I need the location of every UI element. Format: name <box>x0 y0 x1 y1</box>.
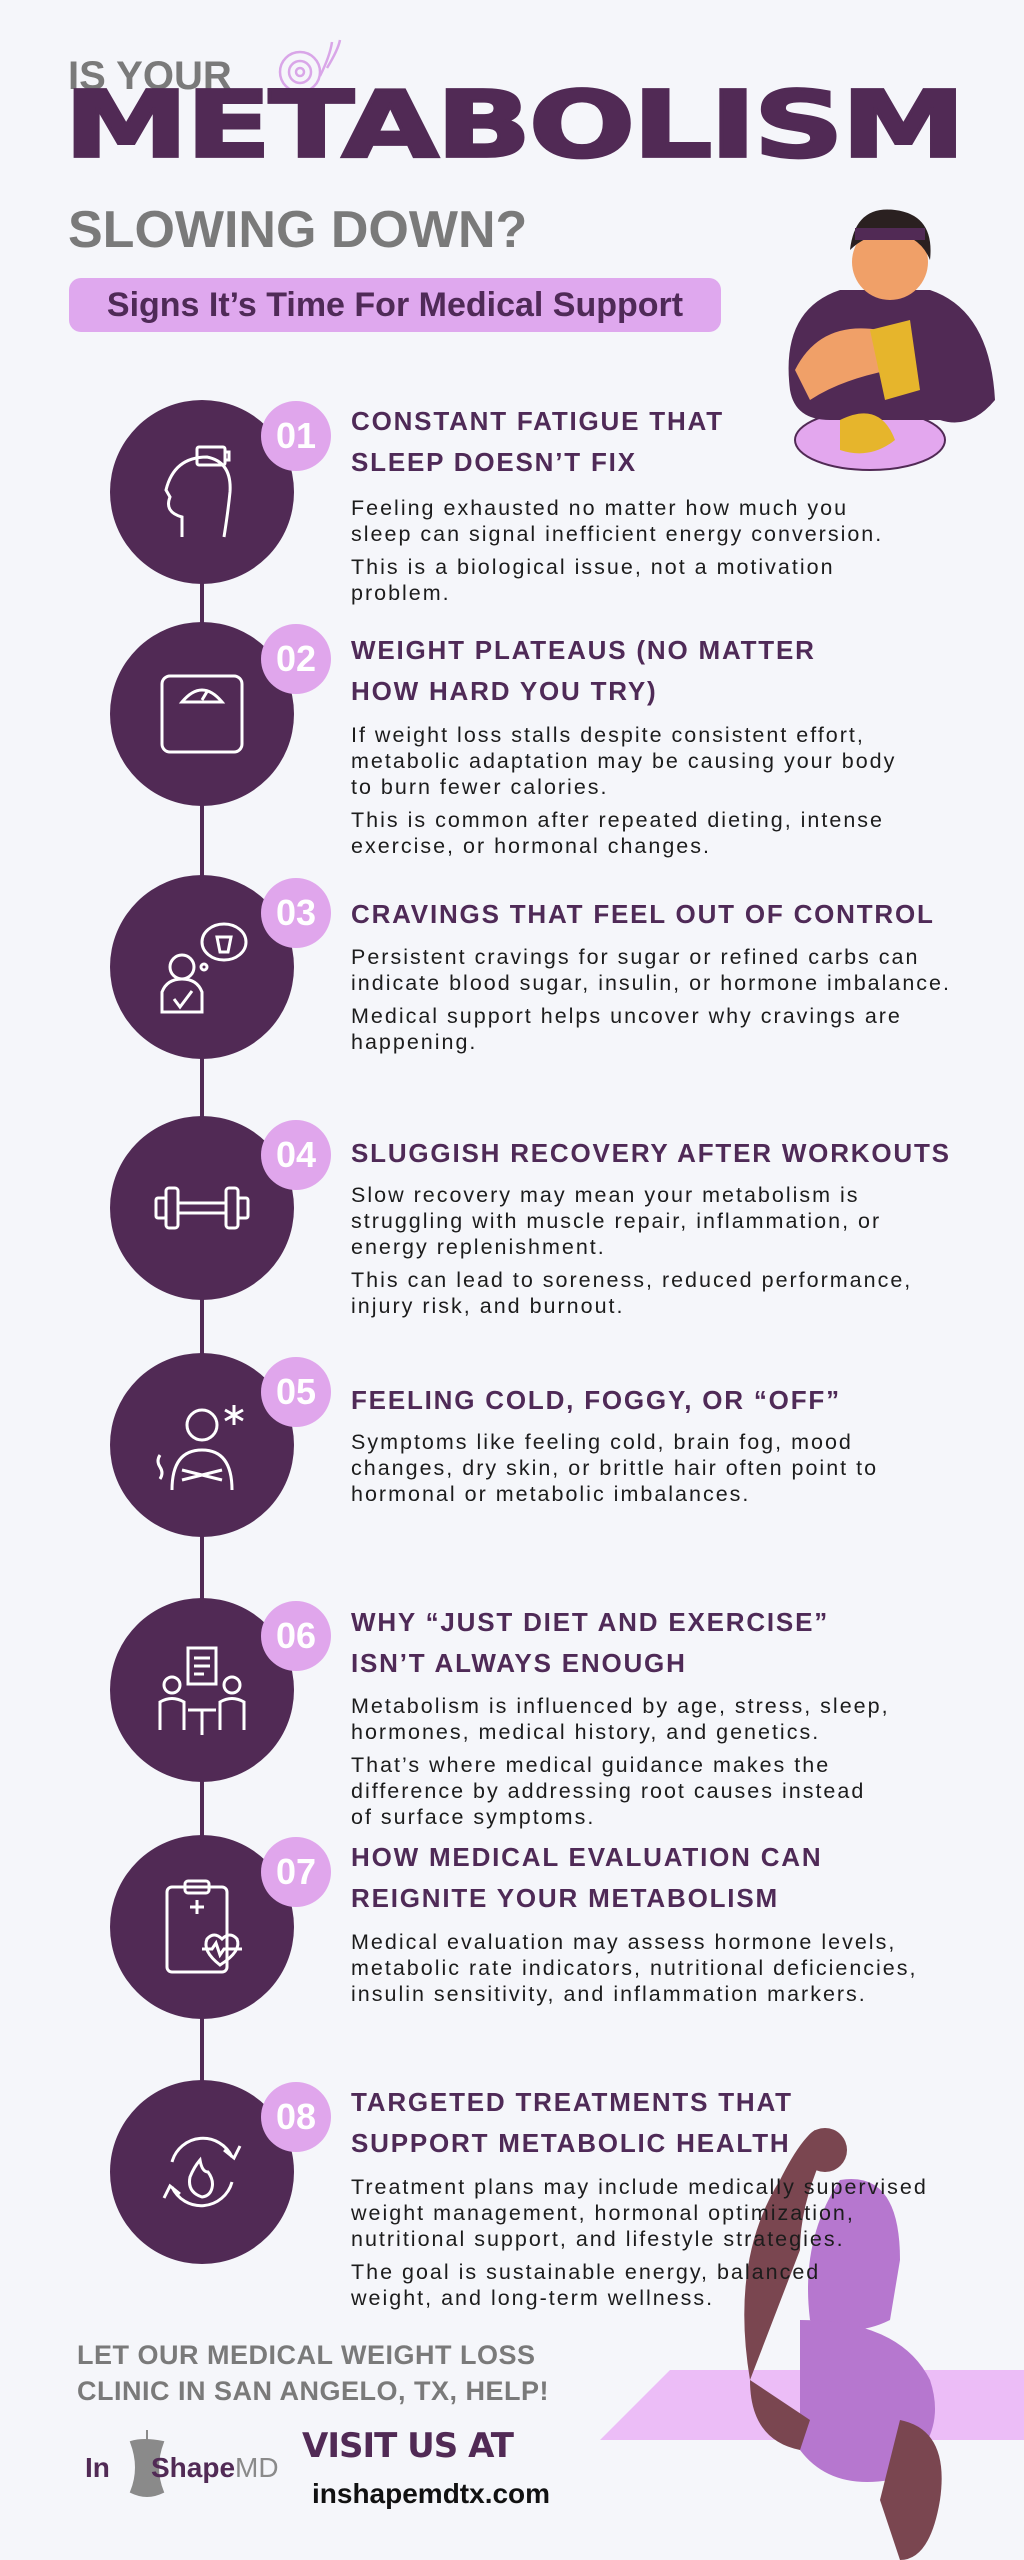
body 08: weight management, hormonal optimization, <box>351 2201 855 2225</box>
heading 02: HOW HARD YOU TRY) <box>351 676 657 706</box>
body 06: Metabolism is influenced by age, stress, sleep, <box>351 1694 890 1718</box>
body 03 <box>351 945 951 1054</box>
url: inshapemdtx.com <box>312 2478 550 2509</box>
body 02: metabolic adaptation may be causing your body <box>351 749 896 773</box>
logo: InShapeMD <box>85 2430 279 2497</box>
body 08: weight, and long-term wellness. <box>351 2286 714 2310</box>
badge 05: 05 <box>276 1371 316 1412</box>
item 03 <box>110 875 331 1059</box>
badge 05 <box>261 1357 331 1427</box>
heading 06: WHY “JUST DIET AND EXERCISE” <box>351 1607 829 1637</box>
body 06: hormones, medical history, and genetics. That’s where medical guidance makes the <box>351 1720 830 1777</box>
illustration: woman eating <box>788 210 995 471</box>
badge 02: 02 <box>276 638 316 679</box>
body 08: nutritional support, and lifestyle strategies. The goal is sustainable energy, balanced <box>351 2227 845 2284</box>
body 06: difference by addressing root causes instead <box>351 1779 865 1803</box>
body 01: Feeling exhausted no matter how much you <box>351 496 848 520</box>
badge 06: 06 <box>276 1615 316 1656</box>
item 08 <box>110 2080 331 2264</box>
item 01 <box>110 400 331 584</box>
badge 03 <box>261 878 331 948</box>
body 05: hormonal or metabolic imbalances. <box>351 1482 750 1506</box>
badge 08 <box>261 2082 331 2152</box>
illustration: yoga woman <box>600 2128 1024 2560</box>
body 05 <box>351 1430 878 1506</box>
body 02: exercise, or hormonal changes. <box>351 834 711 858</box>
heading 07 <box>351 1842 822 1913</box>
heading 06 <box>351 1607 829 1678</box>
icon: apple core <box>130 2430 164 2497</box>
heading 01: CONSTANT FATIGUE THAT <box>351 406 724 436</box>
heading 05: FEELING COLD, FOGGY, OR “OFF” <box>351 1385 841 1415</box>
body 01 <box>351 496 883 605</box>
body 04: injury risk, and burnout. <box>351 1294 624 1318</box>
body 07 <box>351 1930 917 2006</box>
badge 02 <box>261 624 331 694</box>
heading 01 <box>351 406 724 477</box>
title: is your: IS YOUR <box>68 54 232 98</box>
heading 02 <box>351 635 816 706</box>
badge 07: 07 <box>276 1851 316 1892</box>
footer cta text: CLINIC IN SAN ANGELO, TX, HELP! <box>77 2376 549 2406</box>
footer cta text <box>77 2340 549 2406</box>
badge 06 <box>261 1601 331 1671</box>
item 02 <box>110 622 331 806</box>
badge 04: 04 <box>276 1134 316 1175</box>
badge 04 <box>261 1120 331 1190</box>
icon: craving thought <box>110 875 294 1059</box>
body 06 <box>351 1694 890 1829</box>
badge 01 <box>261 401 331 471</box>
body 02: If weight loss stalls despite consistent effort, <box>351 723 865 747</box>
body 06: of surface symptoms. <box>351 1805 595 1829</box>
icon: flame cycle <box>110 2080 294 2264</box>
item 06 <box>110 1598 331 1782</box>
body 07: metabolic rate indicators, nutritional deficiencies, <box>351 1956 917 1980</box>
logo: InShapeMD: In <box>85 2452 110 2483</box>
heading 08: SUPPORT METABOLIC HEALTH <box>351 2128 790 2158</box>
body 02 <box>351 723 896 858</box>
body 02: to burn fewer calories. This is common after repeated dieting, intense <box>351 775 884 832</box>
heading 06: ISN’T ALWAYS ENOUGH <box>351 1648 687 1678</box>
heading 08: TARGETED TREATMENTS THAT <box>351 2087 793 2117</box>
footer cta text: LET OUR MEDICAL WEIGHT LOSS <box>77 2340 536 2370</box>
body 01: problem. <box>351 581 451 605</box>
item 05 <box>110 1353 331 1537</box>
body 01: sleep can signal inefficient energy conversion. This is a biological issue, not a motivation <box>351 522 883 579</box>
body 03: happening. <box>351 1030 477 1054</box>
badge 01: 01 <box>276 415 316 456</box>
icon: clipboard heart <box>110 1835 294 2019</box>
icon: head with battery <box>110 400 294 584</box>
heading 07: HOW MEDICAL EVALUATION CAN <box>351 1842 822 1872</box>
visit us at: VISIT US AT <box>302 2426 513 2466</box>
timeline line <box>200 490 204 2170</box>
body 04: struggling with muscle repair, inflammation, or <box>351 1209 881 1233</box>
body 07: Medical evaluation may assess hormone levels, <box>351 1930 896 1954</box>
subtitle pill <box>69 278 721 332</box>
icon: scale <box>110 622 294 806</box>
item 04 <box>110 1116 331 1300</box>
body 04: energy replenishment. This can lead to soreness, reduced performance, <box>351 1235 912 1292</box>
body 04: Slow recovery may mean your metabolism is <box>351 1183 860 1207</box>
icon: cold person <box>110 1353 294 1537</box>
badge 07 <box>261 1837 331 1907</box>
heading 04: SLUGGISH RECOVERY AFTER WORKOUTS <box>351 1138 951 1168</box>
body 07: insulin sensitivity, and inflammation markers. <box>351 1982 867 2006</box>
title: slowing down: SLOWING DOWN? <box>68 201 527 259</box>
item 07 <box>110 1835 331 2019</box>
icon: consultation <box>110 1598 294 1782</box>
body 03: indicate blood sugar, insulin, or hormone imbalance. Medical support helps uncover why cravings are <box>351 971 951 1028</box>
body 05: changes, dry skin, or brittle hair often point to <box>351 1456 878 1480</box>
icon: dumbbell <box>110 1116 294 1300</box>
body 03: Persistent cravings for sugar or refined carbs can <box>351 945 919 969</box>
title: metabolism: METABOLISM <box>64 71 963 179</box>
body 04 <box>351 1183 912 1318</box>
heading 02: WEIGHT PLATEAUS (NO MATTER <box>351 635 816 665</box>
body 05: Symptoms like feeling cold, brain fog, mood <box>351 1430 853 1454</box>
logo: InShapeMD: ShapeMD <box>151 2452 279 2483</box>
badge 08: 08 <box>276 2096 316 2137</box>
icon: snail <box>278 40 342 88</box>
heading 07: REIGNITE YOUR METABOLISM <box>351 1883 779 1913</box>
body 08: Treatment plans may include medically supervised <box>351 2175 928 2199</box>
heading 08 <box>351 2087 793 2158</box>
heading 01: SLEEP DOESN’T FIX <box>351 447 637 477</box>
badge 03: 03 <box>276 892 316 933</box>
heading 03: CRAVINGS THAT FEEL OUT OF CONTROL <box>351 899 935 929</box>
subtitle pill: Signs It’s Time For Medical Support <box>107 286 683 324</box>
body 08 <box>351 2175 928 2310</box>
